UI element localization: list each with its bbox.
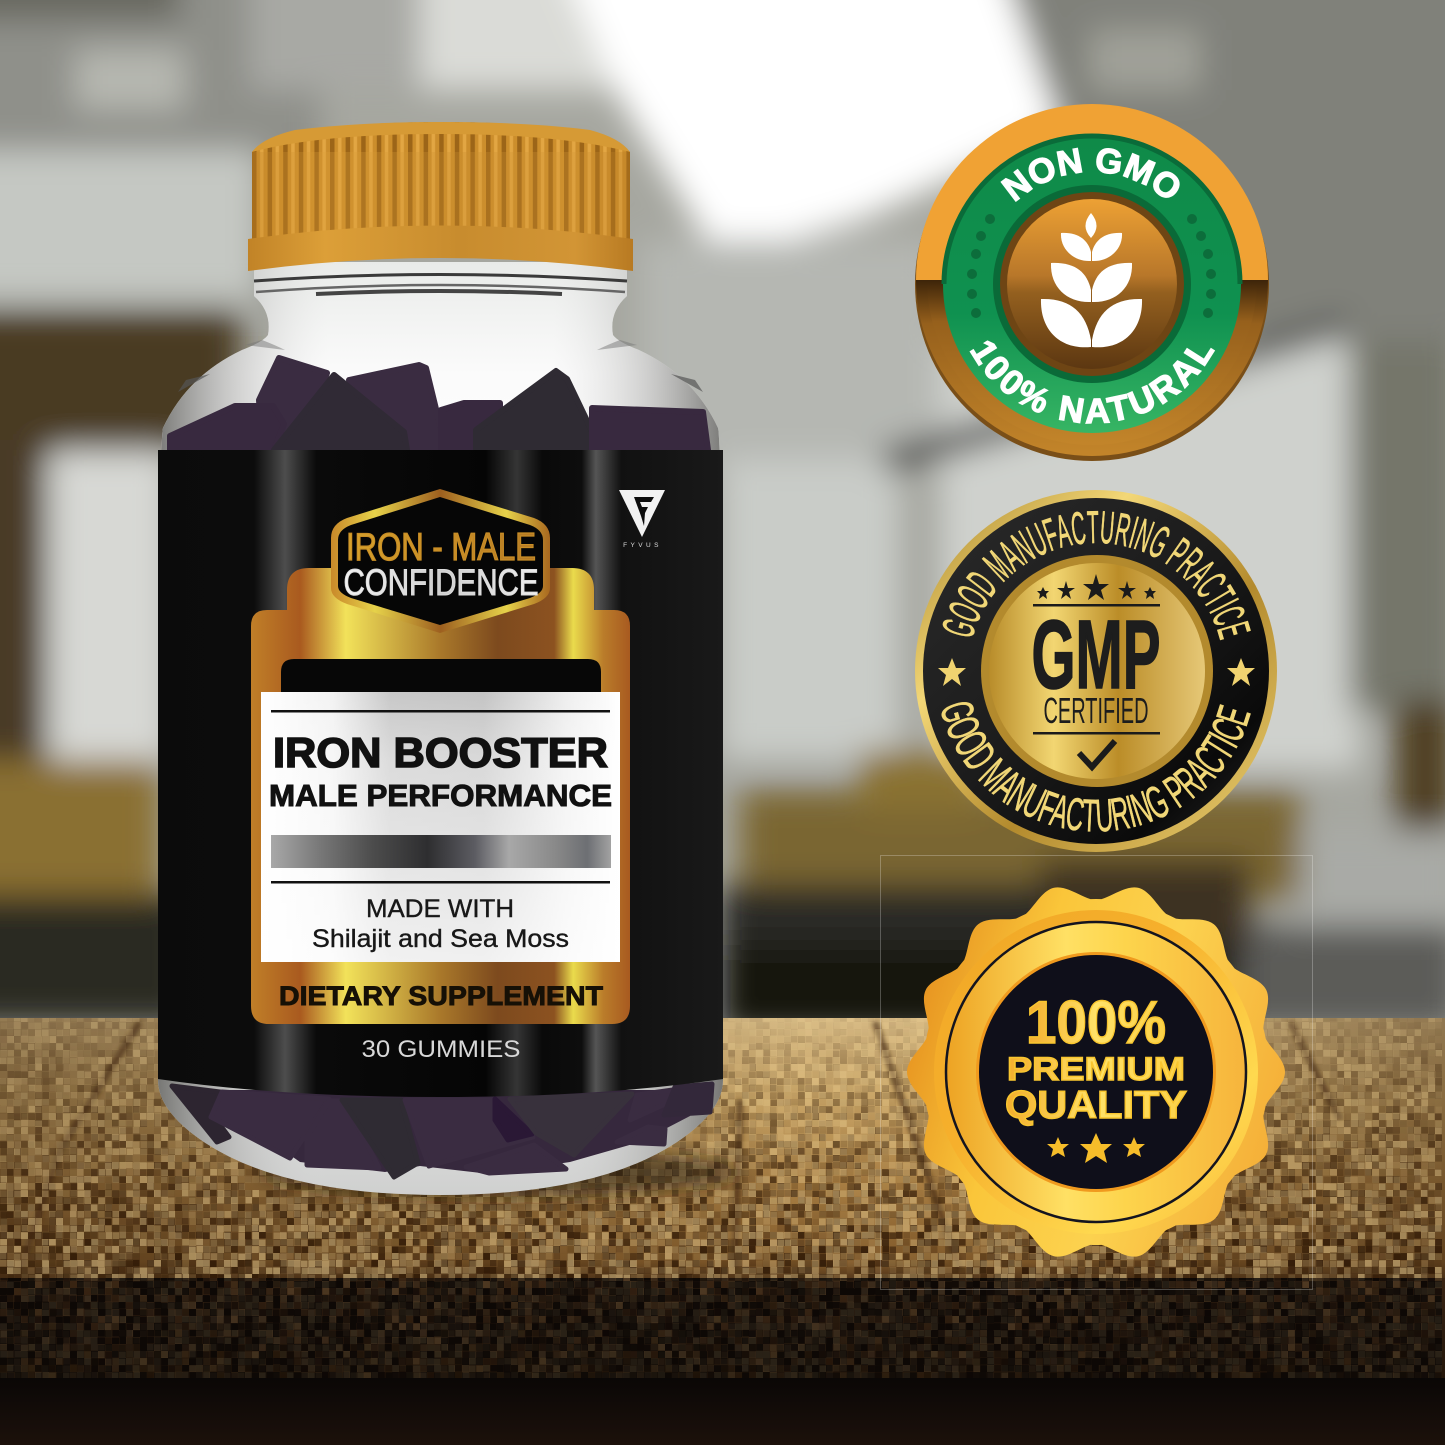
icon: brand logo (619, 490, 665, 549)
seal text: PREMIUM (1007, 1051, 1185, 1087)
badge: GMP certified (915, 490, 1277, 852)
glass jar (158, 262, 723, 1195)
black bar above panel (281, 659, 601, 692)
made with text (312, 895, 569, 953)
ring dots (967, 214, 1216, 318)
hexagon brand badge: IRON - MALE (346, 526, 536, 569)
ring text: NON GMO (1000, 148, 1180, 202)
product name (269, 729, 612, 813)
bottle shadow (260, 1148, 740, 1196)
certified text: CERTIFIED (1044, 690, 1148, 731)
ring text: GOOD MANUFACTURING PRACTICE (942, 510, 1251, 640)
wooden table top (0, 1018, 1445, 1278)
cap (248, 122, 633, 271)
ring text: 100% NATURAL (970, 340, 1216, 424)
black label (158, 450, 723, 1097)
icon: brand logo: FYVUS (623, 542, 662, 549)
badge: non GMO (915, 104, 1269, 461)
badge: premium quality seal (901, 877, 1291, 1267)
GMP text: GMP (1032, 600, 1160, 709)
product bottle (158, 122, 723, 1195)
dietary supplement text: DIETARY SUPPLEMENT (279, 981, 604, 1011)
white info panel (261, 692, 620, 962)
product name: IRON BOOSTER (273, 729, 608, 776)
seal text: QUALITY (1005, 1084, 1187, 1127)
icon: check mark (1079, 741, 1115, 767)
icon: top stars (1037, 574, 1156, 600)
seal text (1005, 989, 1187, 1127)
thin frame around seal (880, 856, 1312, 1290)
ring text (970, 148, 1216, 424)
gummies: top (170, 358, 708, 450)
background: blurred room (0, 0, 1445, 1035)
count text: 30 GUMMIES (362, 1036, 520, 1063)
seal text: 100% (1026, 989, 1166, 1056)
icon: side stars (938, 658, 1255, 686)
product name: MALE PERFORMANCE (269, 778, 612, 813)
hexagon brand badge: CONFIDENCE (344, 562, 538, 603)
gold label panel (251, 568, 630, 1024)
ring text (942, 510, 1251, 832)
icon: seal stars (1047, 1133, 1145, 1163)
table front edge (0, 1278, 1445, 1445)
hexagon brand badge (331, 489, 550, 633)
icon: wheat (1041, 213, 1142, 347)
made with text: Shilajit and Sea Moss (312, 925, 569, 953)
gummies: bottom (172, 1084, 712, 1177)
made with text: MADE WITH (366, 895, 514, 923)
ring text: GOOD MANUFACTURING PRACTICE (942, 702, 1251, 832)
